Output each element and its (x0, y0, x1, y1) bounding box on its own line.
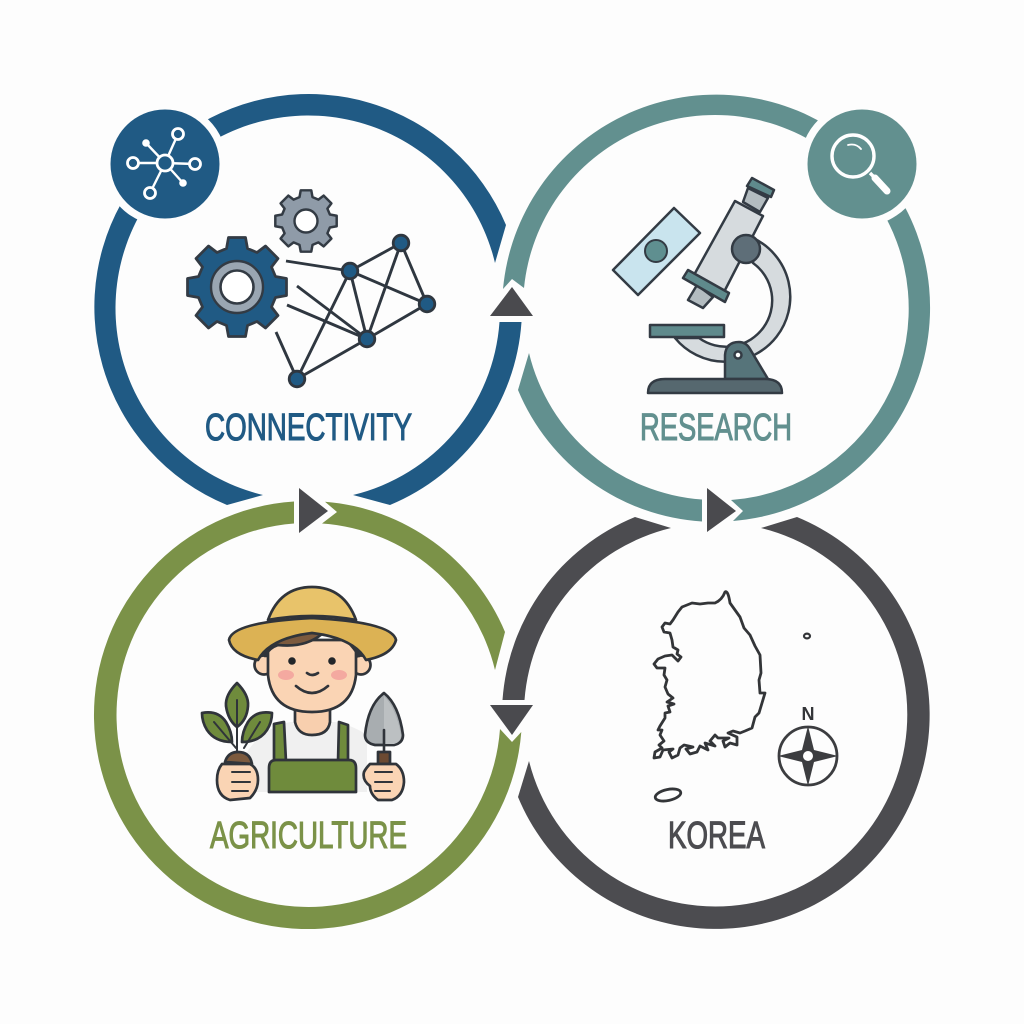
icon: compass: N (802, 704, 814, 724)
icon: microscope (648, 178, 790, 393)
panel: agriculture (94, 502, 521, 929)
cheeks (278, 670, 347, 680)
icon: compass (778, 704, 838, 786)
label: research: RESEARCH (640, 407, 792, 449)
icon: glass slide (613, 208, 700, 295)
blue ring (94, 94, 522, 505)
arrow: agriculture to connectivity (299, 488, 328, 533)
soil (225, 752, 252, 764)
panel: research (503, 95, 930, 522)
arrow: connectivity to research (490, 287, 533, 316)
label: korea: KOREA (668, 815, 765, 857)
badge: magnifier icon (800, 102, 924, 226)
green ring (94, 502, 521, 929)
arrow: korea to agriculture (490, 705, 533, 735)
smile (296, 673, 328, 693)
hair (265, 632, 359, 656)
hat crown (268, 587, 356, 620)
hat brim (229, 618, 396, 660)
panel: korea (502, 517, 930, 929)
label: connectivity: CONNECTIVITY (205, 407, 412, 449)
icon: large blue gear (188, 238, 286, 336)
arrow: research to korea (707, 488, 736, 532)
label: agriculture: AGRICULTURE (210, 815, 407, 857)
neck (295, 708, 330, 735)
dark ring (502, 517, 930, 929)
ears (254, 656, 370, 674)
map: south korea (654, 592, 810, 803)
icon: farmer (202, 587, 404, 800)
eyes (288, 657, 336, 665)
face (268, 640, 356, 712)
icon: network graph (276, 235, 435, 387)
badge: network icon (103, 102, 227, 226)
trowel blade (365, 693, 403, 745)
teal ring (503, 95, 930, 522)
shirt (245, 722, 367, 792)
panel: connectivity (94, 94, 522, 505)
right hand (364, 764, 404, 800)
overall straps and bib (269, 722, 356, 792)
plant (202, 683, 272, 742)
icon: small grey gear (275, 190, 337, 252)
left hand (217, 764, 258, 800)
